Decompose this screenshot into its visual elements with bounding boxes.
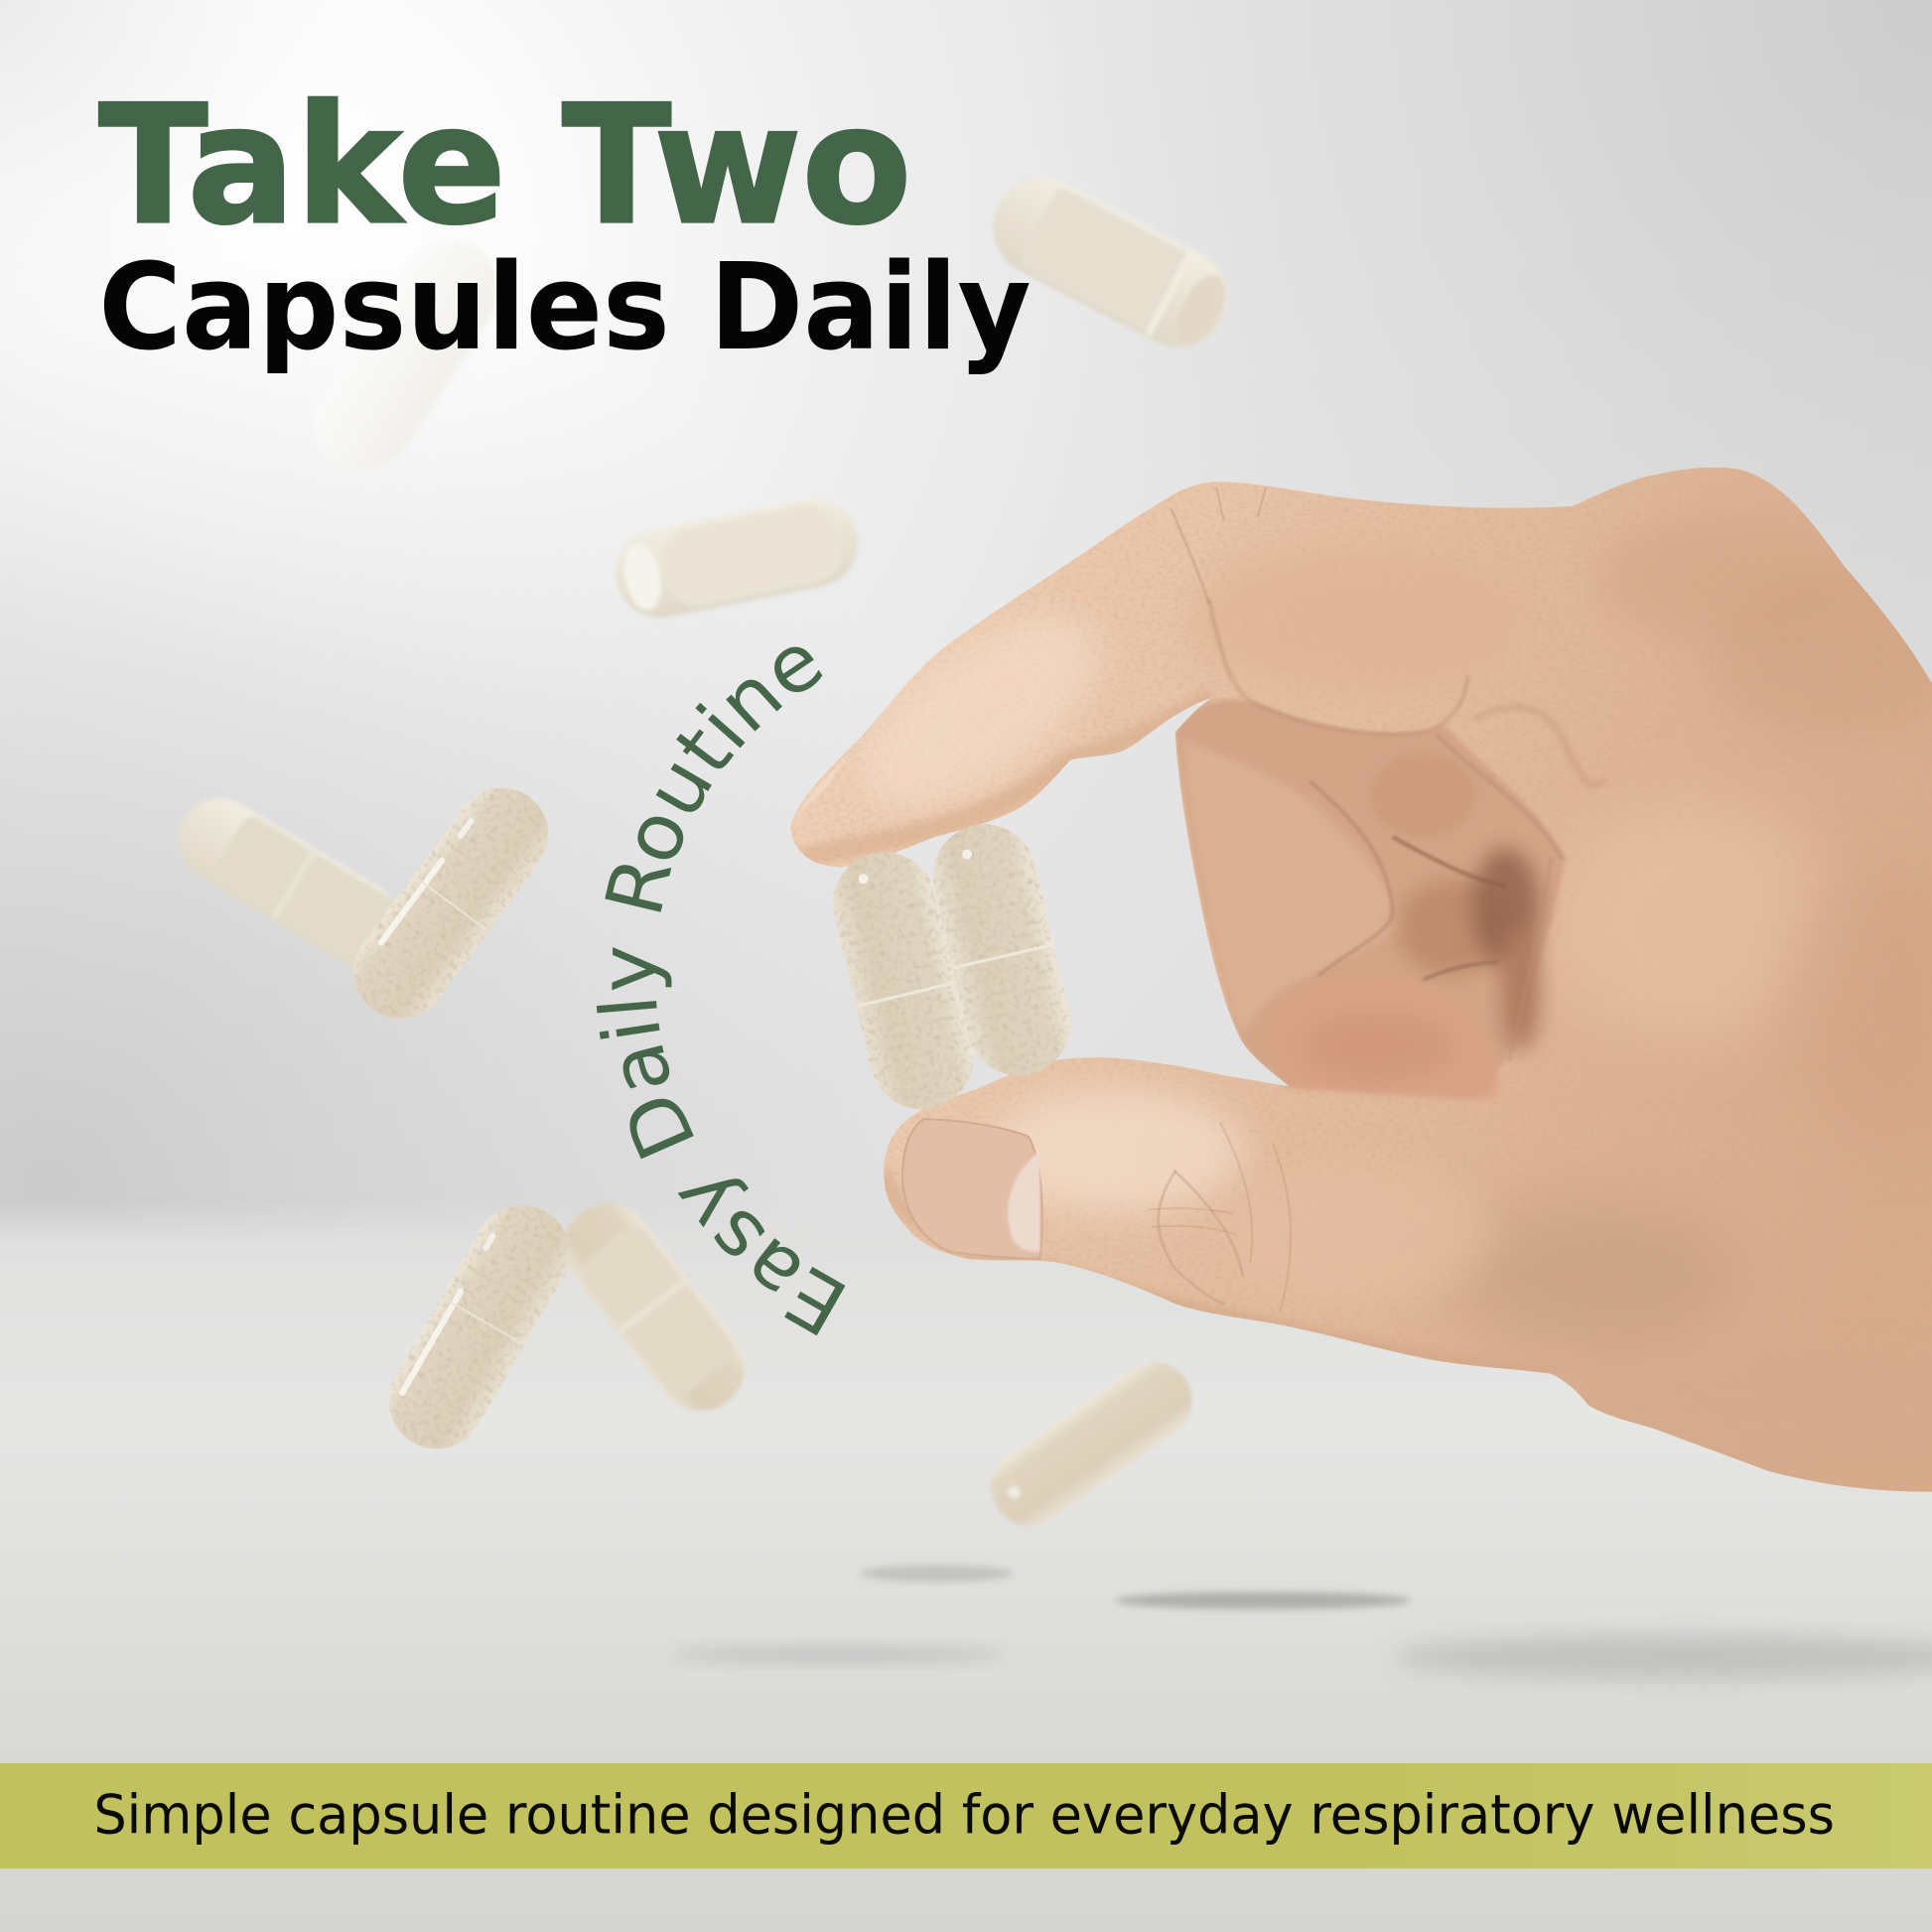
title: Capsules Daily [98,238,1032,377]
banner text: Simple capsule routine designed for everyday respiratory wellness [93,1783,1835,1847]
title: Take Two [98,69,911,260]
capsule: lower left sharp [371,1187,588,1466]
curved text: Easy Daily Routine: Easy Daily Routine [596,647,846,1336]
hand pinching capsules [755,447,1932,1539]
background: studio floor [0,1201,1932,1932]
capsule: blurred white behind title [296,220,517,489]
hand: knuckle fold and creases [1149,488,1603,1311]
capsule: held right [922,814,1081,1086]
capsule: held left [822,842,984,1120]
hand: skin base [755,447,1932,1539]
capsule: lower centre blurred [546,1185,762,1429]
hand: thumbnail [902,1119,1042,1259]
hand: curled fingers in shadow [1175,700,1566,1098]
hand: shading [799,516,1932,1464]
capsule: left sharp [335,769,567,1037]
capsule: top right [976,161,1244,364]
background: studio wall [0,0,1932,1355]
capsule: lower right blurred [976,1347,1207,1541]
capsule: upper middle [608,490,866,625]
hand: index fingertip [794,761,842,820]
capsule: left blurred [163,783,417,982]
floor shadows [671,1565,1932,1680]
title [98,69,1032,377]
banner [0,1763,1932,1868]
